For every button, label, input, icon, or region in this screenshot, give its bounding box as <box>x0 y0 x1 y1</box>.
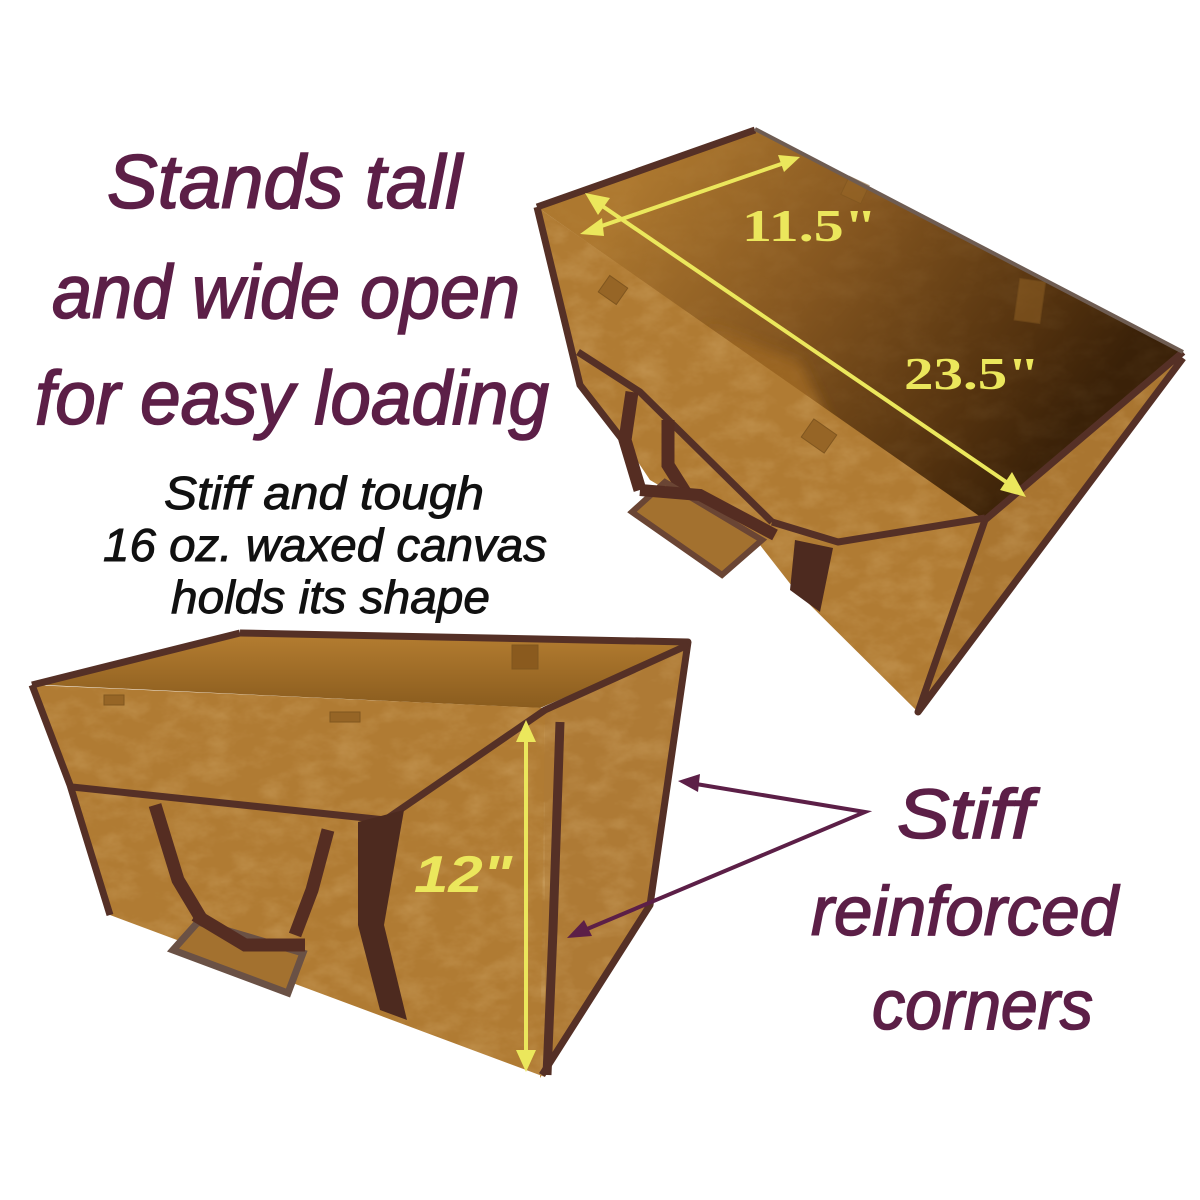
stitched tabs <box>104 645 538 722</box>
back rim <box>755 129 1183 352</box>
binding trim <box>32 633 688 1075</box>
callout arrows to corners <box>567 774 865 938</box>
label 23.5: 23.5" <box>904 348 1040 399</box>
bag binding trim <box>537 130 1183 712</box>
heading: stands tall and wide open: and wide open <box>52 250 520 335</box>
heading: stands tall and wide open: for easy loading <box>35 356 549 441</box>
photo: bag from above <box>537 129 1183 712</box>
callout text: stiff reinforced corners: corners <box>872 966 1093 1044</box>
bag outer walls <box>537 207 985 712</box>
callout text: stiff reinforced corners <box>811 775 1120 1044</box>
front wall <box>32 685 545 1077</box>
interior <box>45 636 688 708</box>
dimension arrow 12 <box>516 720 536 1072</box>
dimension arrow 11.5 <box>580 155 1026 497</box>
handle strap <box>625 392 833 612</box>
right side wall <box>540 642 688 1078</box>
subheading: waxed canvas <box>103 467 547 623</box>
label 11.5: 11.5" <box>742 200 877 251</box>
label 12: 12" <box>414 846 514 904</box>
front strap <box>358 810 407 1020</box>
heading: stands tall and wide open <box>35 140 549 441</box>
photo: bag from the side <box>32 633 688 1078</box>
stitched tabs <box>598 176 1046 453</box>
callout text: stiff reinforced corners: reinforced <box>811 872 1120 950</box>
handle <box>155 805 328 993</box>
subheading: waxed canvas: holds its shape <box>171 571 490 623</box>
dimension arrow 23.5 <box>595 201 1015 488</box>
subheading: waxed canvas: 16 oz. waxed canvas <box>103 519 547 571</box>
subheading: waxed canvas: Stiff and tough <box>164 467 484 519</box>
bag interior <box>537 130 1180 522</box>
heading: stands tall and wide open: Stands tall <box>107 140 464 225</box>
callout text: stiff reinforced corners: Stiff <box>897 775 1040 853</box>
